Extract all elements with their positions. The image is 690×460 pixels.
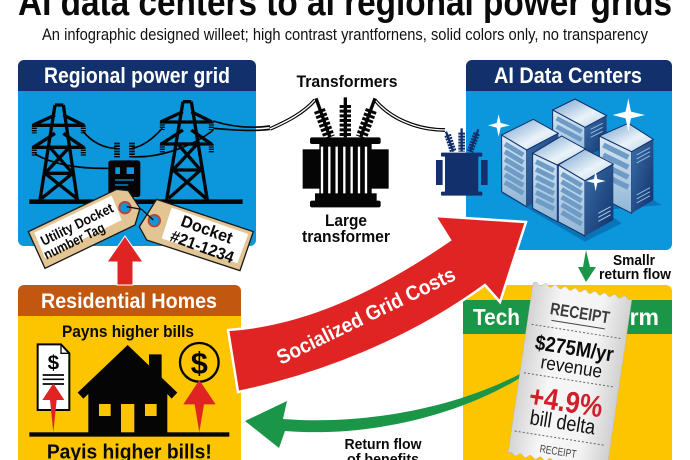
icon: docket tags — [28, 189, 253, 271]
tag: utility docket: number Tag — [41, 219, 107, 262]
text: pays higher bills: Payns higher bills — [62, 323, 194, 341]
icon: dollar coin: $ — [191, 346, 208, 380]
panel background — [463, 285, 672, 460]
panel heading right: Firm — [609, 304, 659, 330]
transformers group — [270, 97, 488, 207]
arrow: socialized grid costs — [228, 216, 526, 392]
tag: utility docket — [28, 189, 140, 268]
label: large transformer — [302, 211, 390, 246]
ground line — [29, 432, 229, 437]
icon: server racks — [488, 98, 662, 242]
panel header — [18, 60, 256, 91]
panel background — [466, 91, 672, 250]
tag: docket number — [139, 199, 253, 271]
label: return flow of benefits: Return flow — [344, 436, 422, 453]
label: transformers: Transformers — [296, 73, 398, 91]
tag: utility docket: Utility Docket — [38, 200, 116, 249]
label: large transformer: transformer — [302, 227, 390, 246]
panel header — [466, 60, 672, 91]
icon: pylons and substation — [29, 102, 270, 202]
tag: docket number: Docket — [178, 211, 236, 248]
icon: sparkle large — [613, 98, 645, 132]
server: right — [599, 123, 653, 213]
label: smaller return flow: Smallr — [613, 252, 655, 269]
icon: house — [78, 345, 177, 433]
label: smaller return flow — [599, 252, 671, 283]
receipt — [506, 282, 634, 460]
receipt revenue label: revenue — [539, 352, 604, 383]
icon: insulators — [117, 143, 132, 157]
icon: left pylon — [32, 105, 85, 200]
receipt revenue figure: $275M/yr — [533, 331, 615, 366]
server: left — [502, 119, 558, 207]
arrow: smaller return flow — [578, 250, 596, 282]
arrow label: Socialized Grid Costs — [273, 263, 459, 369]
receipt paper — [506, 282, 634, 460]
tag: docket number: #21-1234 — [168, 227, 237, 267]
tag string — [127, 207, 153, 220]
panel header band — [463, 300, 672, 334]
panel: tech firm — [463, 285, 672, 460]
icon: right pylon — [160, 102, 213, 200]
panel: residential homes — [18, 285, 241, 460]
panel heading left: Tech — [473, 304, 520, 330]
panel background — [18, 316, 241, 460]
arrow: coin up — [183, 380, 216, 432]
receipt bill delta figure: +4.9% — [527, 380, 605, 424]
receipt bill delta label: bill delta — [528, 406, 597, 439]
panel heading: AI Data Centers — [494, 63, 642, 88]
icon: bill document: $ — [48, 351, 60, 374]
icon: sparkle left — [488, 114, 510, 137]
label: return flow of benefits — [344, 436, 422, 460]
panel heading: Regional power grid — [44, 63, 230, 88]
icon: dollar coin — [180, 343, 219, 382]
label: large transformer: Large — [325, 211, 367, 230]
icon: bill document — [38, 344, 69, 410]
panel: regional power grid — [18, 60, 270, 246]
residential icons — [29, 343, 229, 460]
panel heading: Residential Homes — [41, 289, 217, 313]
arrow: return flow of benefits — [245, 374, 520, 448]
server: middle — [533, 136, 586, 222]
panel: AI data centers — [466, 60, 672, 250]
receipt heading: RECEIPT — [549, 299, 612, 327]
server: back — [553, 99, 607, 157]
icon: large transformer — [303, 97, 389, 207]
label: smaller return flow: return flow — [599, 266, 671, 283]
icon: small transformer — [436, 128, 488, 196]
arrow: grid feed from homes — [107, 236, 143, 285]
panel background — [18, 91, 256, 246]
wires — [270, 100, 445, 130]
server: front — [558, 149, 613, 236]
panel header — [18, 285, 241, 316]
icon: sparkle on server — [586, 171, 606, 191]
arrow: bill up — [42, 383, 64, 432]
icon: substation box — [108, 160, 140, 197]
